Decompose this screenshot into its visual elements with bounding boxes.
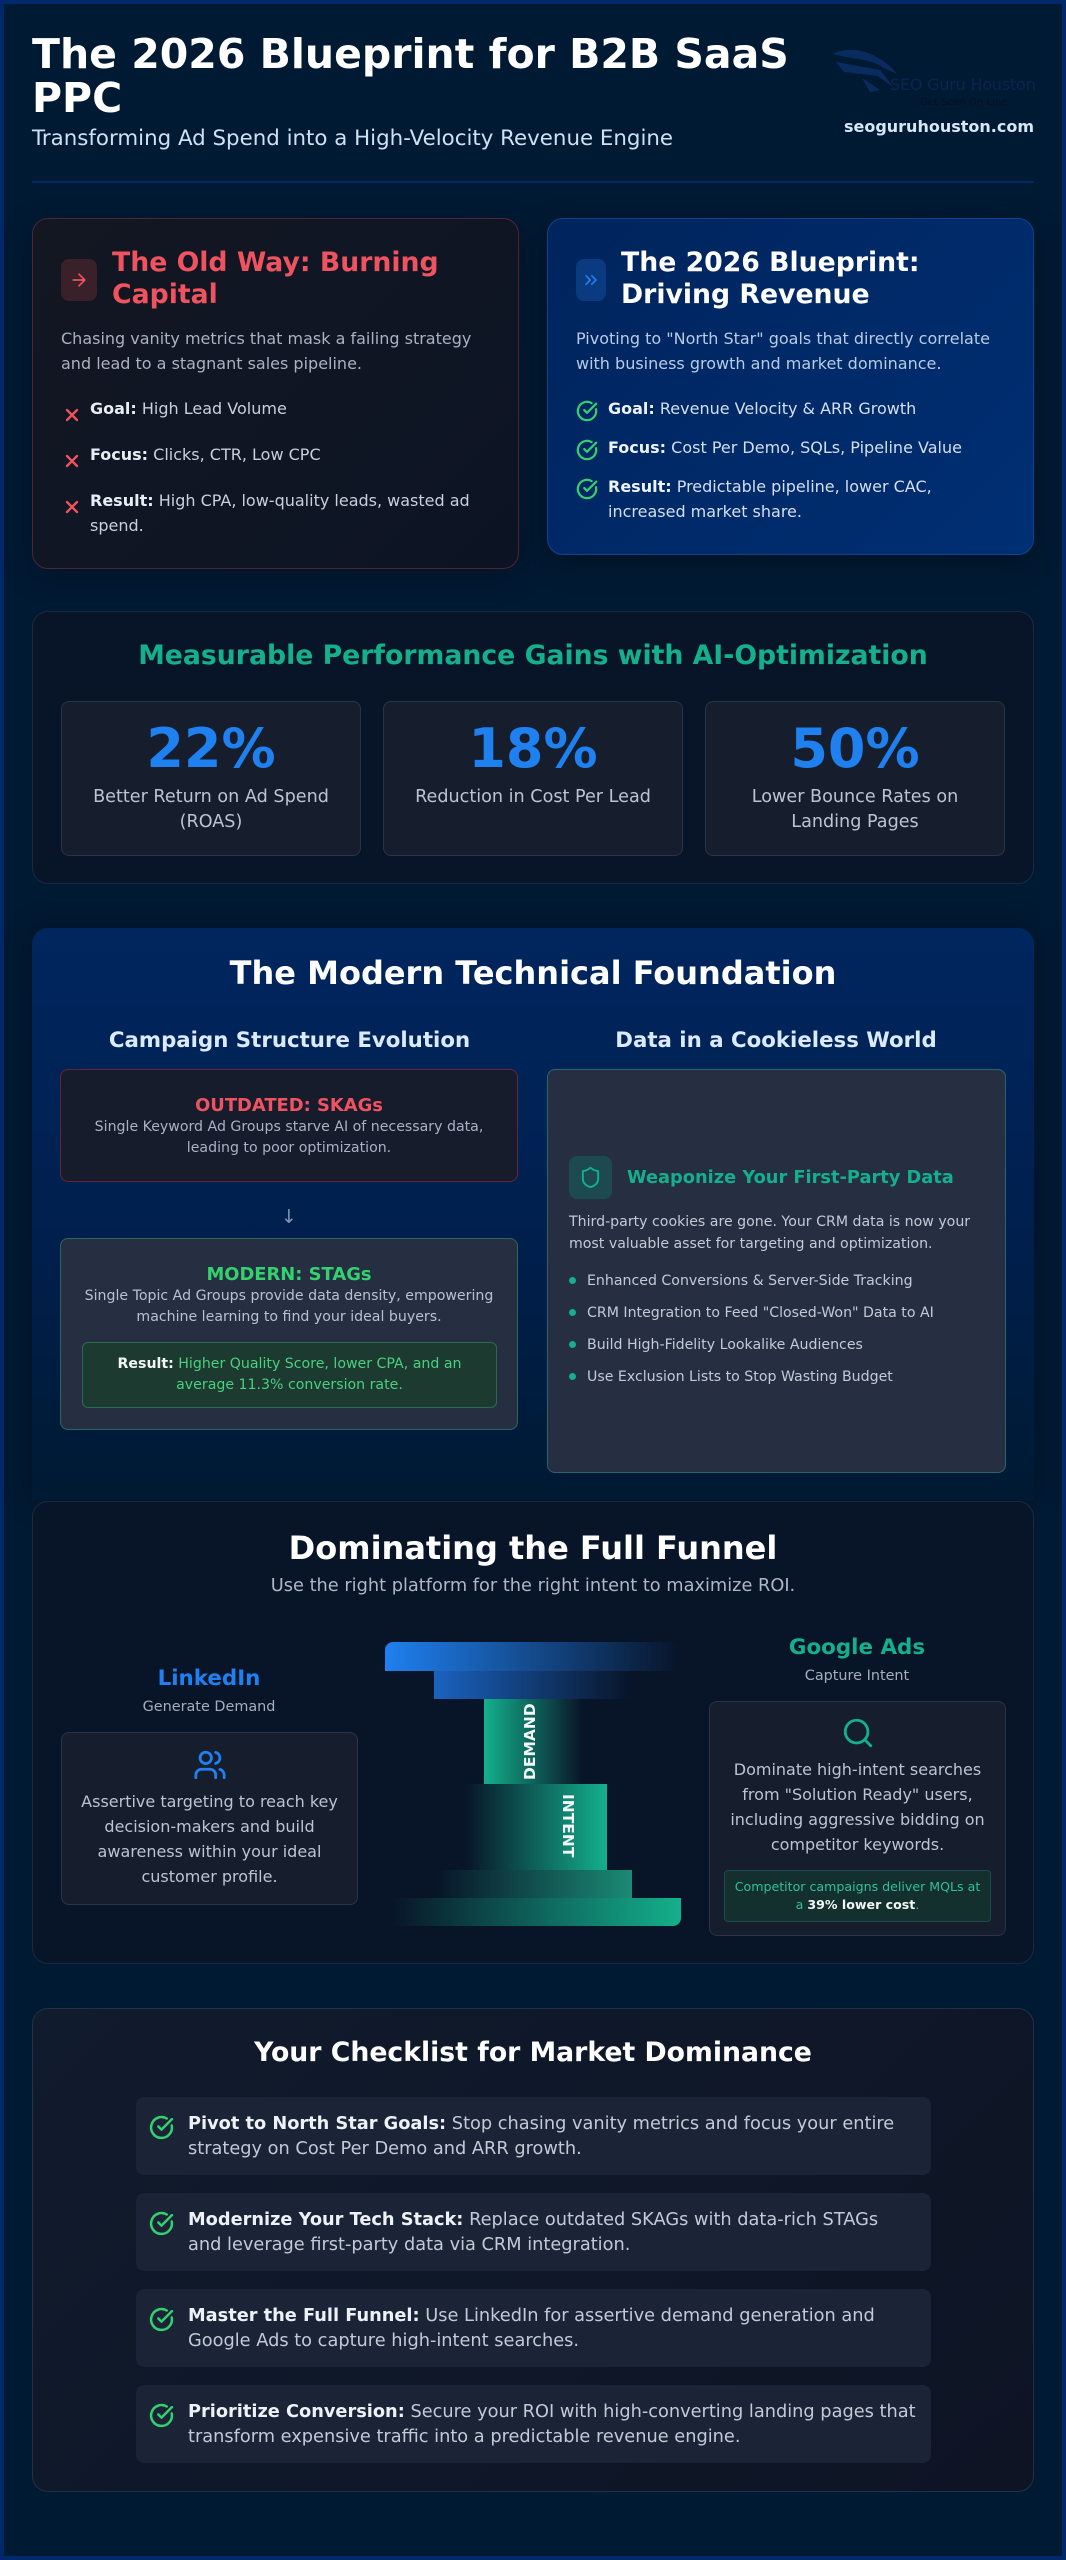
heading: The 2026 Blueprint: bbox=[621, 247, 920, 278]
intro text: with business growth and market dominance. bbox=[576, 354, 941, 373]
stat label: Better Return on Ad Spend bbox=[93, 787, 329, 807]
list item: focus: Focus: Cost Per Demo, SQLs, Pipeline Value bbox=[608, 438, 962, 457]
icon: users bbox=[194, 1750, 226, 1780]
callout: result: Result: Higher Quality Score, lower CPA, and an bbox=[118, 1356, 461, 1372]
heading: Dominating the Full Funnel bbox=[289, 1529, 777, 1567]
list item: result: increased market share. bbox=[608, 502, 802, 521]
heading bbox=[621, 247, 920, 310]
box title: MODERN: STAGs bbox=[206, 1264, 372, 1285]
stat value: 50% bbox=[790, 717, 920, 780]
list item: result bbox=[66, 491, 470, 535]
intro text bbox=[61, 329, 471, 373]
checklist item 3: Google Ads to capture high-intent searches. bbox=[188, 2331, 579, 2351]
icon: arrow bbox=[61, 259, 97, 301]
box: outdated SKAGs bbox=[60, 1069, 518, 1182]
platform heading: LinkedIn: LinkedIn bbox=[158, 1666, 260, 1691]
card text: including aggressive bidding on bbox=[730, 1810, 985, 1829]
panel: performance gains bbox=[32, 611, 1034, 884]
box text: most valuable asset for targeting and optimization. bbox=[569, 1236, 933, 1252]
stat value: 18% bbox=[468, 717, 598, 780]
list item: result: spend. bbox=[90, 516, 144, 535]
box text: leading to poor optimization. bbox=[187, 1140, 391, 1156]
box text bbox=[568, 1214, 970, 1252]
checklist item 1 bbox=[136, 2097, 931, 2175]
checklist item 1: strategy on Cost Per Demo and ARR growth. bbox=[188, 2139, 582, 2159]
callout: result: average 11.3% conversion rate. bbox=[176, 1377, 403, 1393]
bullet item: CRM Integration to Feed "Closed-Won" Data to AI bbox=[587, 1305, 934, 1321]
stat value: 22% bbox=[146, 717, 276, 780]
bullet item: Use Exclusion Lists to Stop Wasting Budget bbox=[587, 1369, 893, 1385]
box text bbox=[95, 1119, 483, 1156]
stat card: ROAS bbox=[61, 701, 361, 856]
funnel bar 6 bbox=[390, 1898, 681, 1926]
stat label: Landing Pages bbox=[791, 812, 919, 832]
card text: from "Solution Ready" users, bbox=[742, 1785, 973, 1804]
platform heading: LinkedIn: Generate Demand bbox=[143, 1699, 275, 1715]
card text: customer profile. bbox=[141, 1867, 278, 1886]
card text: Assertive targeting to reach key bbox=[81, 1792, 338, 1811]
panel: old way bbox=[32, 218, 519, 569]
header bbox=[32, 28, 1034, 183]
stat label: Reduction in Cost Per Lead bbox=[415, 787, 651, 807]
bullet item: Build High-Fidelity Lookalike Audiences bbox=[587, 1337, 863, 1353]
stat card: CPL bbox=[383, 701, 683, 856]
subheading: Use the right platform for the right intent to maximize ROI. bbox=[271, 1576, 795, 1596]
panel: checklist bbox=[32, 2008, 1034, 2492]
checklist item 2 bbox=[136, 2193, 931, 2271]
box: modern STAGs bbox=[60, 1238, 518, 1430]
heading: Capital bbox=[112, 279, 218, 310]
intro text bbox=[576, 329, 990, 373]
subheading: campaign structure: Campaign Structure Evolution bbox=[109, 1028, 470, 1053]
list item: goal: Goal: High Lead Volume bbox=[90, 399, 287, 418]
label: intent: INTENT bbox=[559, 1794, 577, 1857]
icon: logo wing bbox=[833, 50, 897, 92]
box text: machine learning to find your ideal buyers. bbox=[136, 1309, 442, 1325]
title: The 2026 Blueprint for B2B SaaS bbox=[32, 30, 789, 78]
funnel bar 2 bbox=[434, 1671, 632, 1699]
box text bbox=[85, 1288, 493, 1325]
title: PPC bbox=[32, 74, 122, 122]
callout: lower cost: a 39% lower cost. bbox=[796, 1897, 919, 1912]
box title: Weaponize Your First-Party Data bbox=[627, 1167, 954, 1188]
title bbox=[32, 30, 789, 122]
heading: Measurable Performance Gains with AI-Optimization bbox=[138, 640, 928, 671]
checklist item 4 bbox=[136, 2385, 931, 2463]
funnel graphic bbox=[385, 1642, 681, 1926]
intro text: and lead to a stagnant sales pipeline. bbox=[61, 354, 362, 373]
subheading: data: Data in a Cookieless World bbox=[615, 1028, 937, 1053]
box text: Third-party cookies are gone. Your CRM data is now your bbox=[569, 1214, 970, 1230]
icon: chevrons bbox=[576, 259, 606, 301]
platform heading: Google Ads: Google Ads bbox=[789, 1635, 925, 1660]
logo tagline: Get Seen On Line bbox=[920, 97, 1007, 108]
list item: result bbox=[576, 477, 932, 521]
checklist item 3: Master the Full Funnel: Use LinkedIn for assertive demand generation and bbox=[188, 2306, 875, 2326]
bullet item: Enhanced Conversions & Server-Side Tracking bbox=[587, 1273, 913, 1289]
card: LinkedIn bbox=[61, 1732, 358, 1905]
stat label: (ROAS) bbox=[180, 812, 242, 832]
card text: Dominate high-intent searches bbox=[734, 1760, 981, 1779]
heading: Driving Revenue bbox=[621, 279, 870, 310]
box title: OUTDATED: SKAGs bbox=[195, 1095, 383, 1116]
list item: result: Result: High CPA, low-quality leads, wasted ad bbox=[90, 491, 470, 510]
funnel bar 1 bbox=[385, 1642, 681, 1671]
stat label bbox=[93, 787, 329, 832]
stat label bbox=[752, 787, 958, 832]
panel: technical foundation bbox=[32, 928, 1034, 1500]
intro text: Pivoting to "North Star" goals that directly correlate bbox=[576, 329, 990, 348]
checklist item 4: Prioritize Conversion: Secure your ROI with high-converting landing pages that bbox=[188, 2402, 916, 2422]
funnel bar 5 bbox=[435, 1870, 632, 1898]
list item: focus: Focus: Clicks, CTR, Low CPC bbox=[90, 445, 321, 464]
checklist item 2: and leverage first-party data via CRM integration. bbox=[188, 2235, 630, 2255]
logo bbox=[833, 50, 1036, 136]
box: first-party data bbox=[547, 1069, 1006, 1473]
box text: Single Topic Ad Groups provide data density, empowering bbox=[85, 1288, 493, 1304]
checklist item 3 bbox=[136, 2289, 931, 2367]
panel: full funnel bbox=[32, 1501, 1034, 1964]
heading: The Old Way: Burning bbox=[112, 247, 439, 278]
website: seoguruhouston.com bbox=[844, 117, 1034, 136]
list item: goal: Goal: Revenue Velocity & ARR Growth bbox=[608, 399, 916, 418]
stat card: bounce bbox=[705, 701, 1005, 856]
heading: Your Checklist for Market Dominance bbox=[254, 2037, 812, 2068]
arrow: down: ↓ bbox=[281, 1206, 297, 1228]
icon: search bbox=[844, 1718, 872, 1748]
callout: lower cost bbox=[724, 1870, 991, 1922]
funnel bar 4: intent bbox=[465, 1784, 607, 1870]
card text: decision-makers and build bbox=[104, 1817, 315, 1836]
subtitle: Transforming Ad Spend into a High-Velocity Revenue Engine bbox=[32, 126, 673, 151]
label: demand: DEMAND bbox=[521, 1703, 539, 1780]
checklist item 1: Pivot to North Star Goals: Stop chasing vanity metrics and focus your entire bbox=[188, 2114, 894, 2134]
card text: competitor keywords. bbox=[771, 1835, 944, 1854]
box text: Single Keyword Ad Groups starve AI of necessary data, bbox=[95, 1119, 483, 1135]
callout: result bbox=[82, 1342, 497, 1408]
callout: lower cost: Competitor campaigns deliver MQLs at bbox=[735, 1879, 980, 1894]
panel: 2026 blueprint bbox=[547, 218, 1034, 555]
bullet list bbox=[569, 1273, 934, 1385]
card: Google Ads bbox=[709, 1701, 1006, 1936]
heading: The Modern Technical Foundation bbox=[230, 954, 836, 992]
funnel bar 3: demand bbox=[484, 1699, 583, 1784]
stat label: Lower Bounce Rates on bbox=[752, 787, 958, 807]
platform heading: Google Ads: Capture Intent bbox=[805, 1668, 909, 1684]
heading bbox=[112, 247, 439, 310]
list item: result: Result: Predictable pipeline, lower CAC, bbox=[608, 477, 932, 496]
icon: shield bbox=[569, 1156, 612, 1199]
intro text: Chasing vanity metrics that mask a failing strategy bbox=[61, 329, 471, 348]
checklist item 4: transform expensive traffic into a predictable revenue engine. bbox=[188, 2427, 740, 2447]
card text bbox=[730, 1760, 985, 1854]
card text bbox=[81, 1792, 338, 1886]
platform heading: Google Ads bbox=[789, 1635, 925, 1684]
checklist item 2: Modernize Your Tech Stack: Replace outdated SKAGs with data-rich STAGs bbox=[188, 2210, 878, 2230]
card text: awareness within your ideal bbox=[98, 1842, 321, 1861]
platform heading: LinkedIn bbox=[143, 1666, 275, 1715]
logo name: SEO Guru Houston bbox=[890, 75, 1036, 94]
